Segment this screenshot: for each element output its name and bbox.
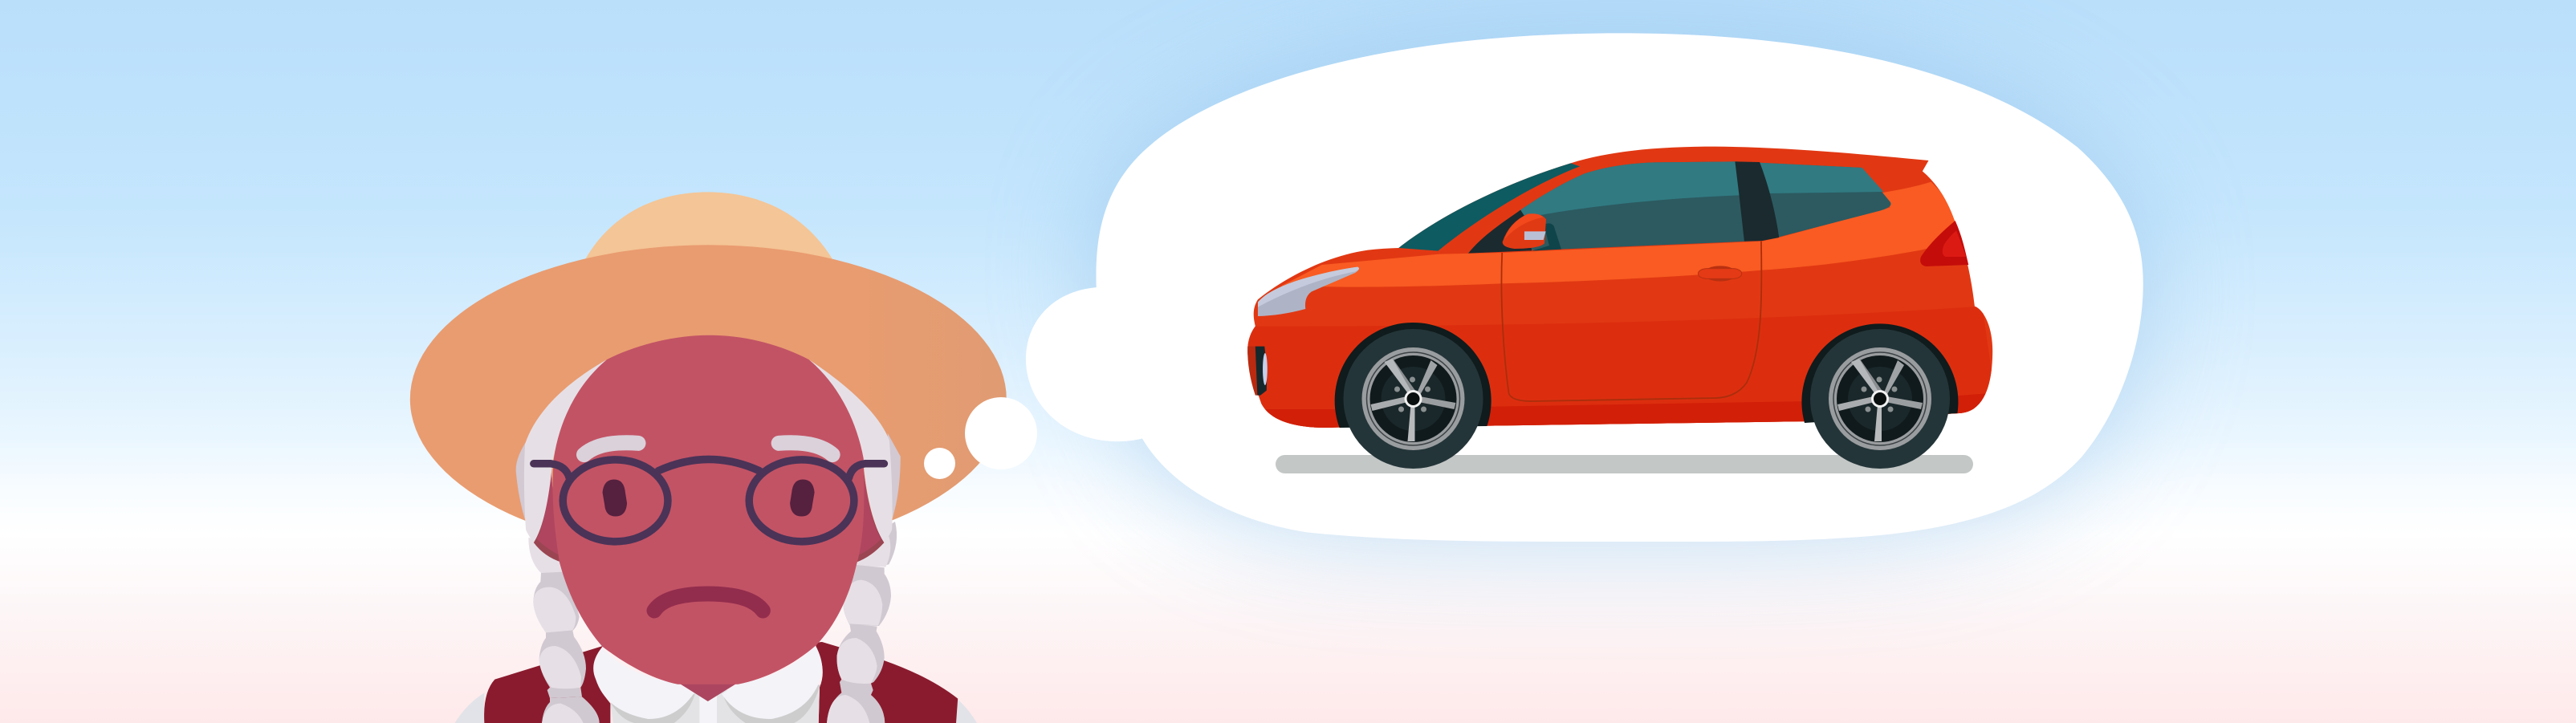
collar	[593, 644, 822, 719]
ears	[534, 469, 884, 563]
door handle	[1698, 266, 1742, 282]
eyebrows	[584, 443, 832, 455]
shirt sleeves	[455, 693, 977, 723]
mouth	[654, 594, 763, 611]
front wheel arch	[1335, 323, 1491, 428]
thought dot large	[965, 397, 1037, 469]
rear wheel	[1810, 329, 1950, 469]
front quarter window	[1468, 210, 1532, 254]
person	[410, 192, 1007, 723]
glasses	[534, 459, 884, 542]
side window	[1520, 161, 1890, 250]
face	[553, 335, 864, 684]
thought bubble	[1026, 33, 2143, 542]
right braid	[827, 522, 897, 723]
tail light	[1920, 221, 1968, 266]
rear wheel arch	[1801, 323, 1958, 423]
hat	[410, 192, 1007, 553]
torso with jacket and collar	[455, 642, 977, 723]
door pillar	[1735, 161, 1779, 242]
hat crown	[585, 192, 832, 304]
jacket	[484, 642, 958, 723]
front wheel	[1344, 329, 1483, 469]
eyes	[603, 479, 815, 517]
car body	[1235, 147, 2003, 449]
collar shadow	[610, 684, 820, 723]
body shading	[1247, 181, 1992, 428]
car	[1235, 147, 2003, 473]
shirt	[610, 688, 820, 723]
neck	[679, 684, 737, 701]
hair	[524, 359, 893, 542]
ground shadow	[1276, 455, 1973, 473]
door outline	[1501, 242, 1761, 401]
thought dot small	[924, 448, 955, 479]
head	[516, 335, 901, 684]
hat brim	[410, 245, 1007, 553]
left braid	[528, 538, 600, 723]
hair shadow	[516, 433, 901, 526]
wing mirror	[1503, 213, 1561, 251]
headlight	[1258, 267, 1359, 316]
bubble glow	[1096, 33, 2143, 542]
front grille	[1247, 347, 1268, 396]
windscreen	[1398, 163, 1580, 251]
